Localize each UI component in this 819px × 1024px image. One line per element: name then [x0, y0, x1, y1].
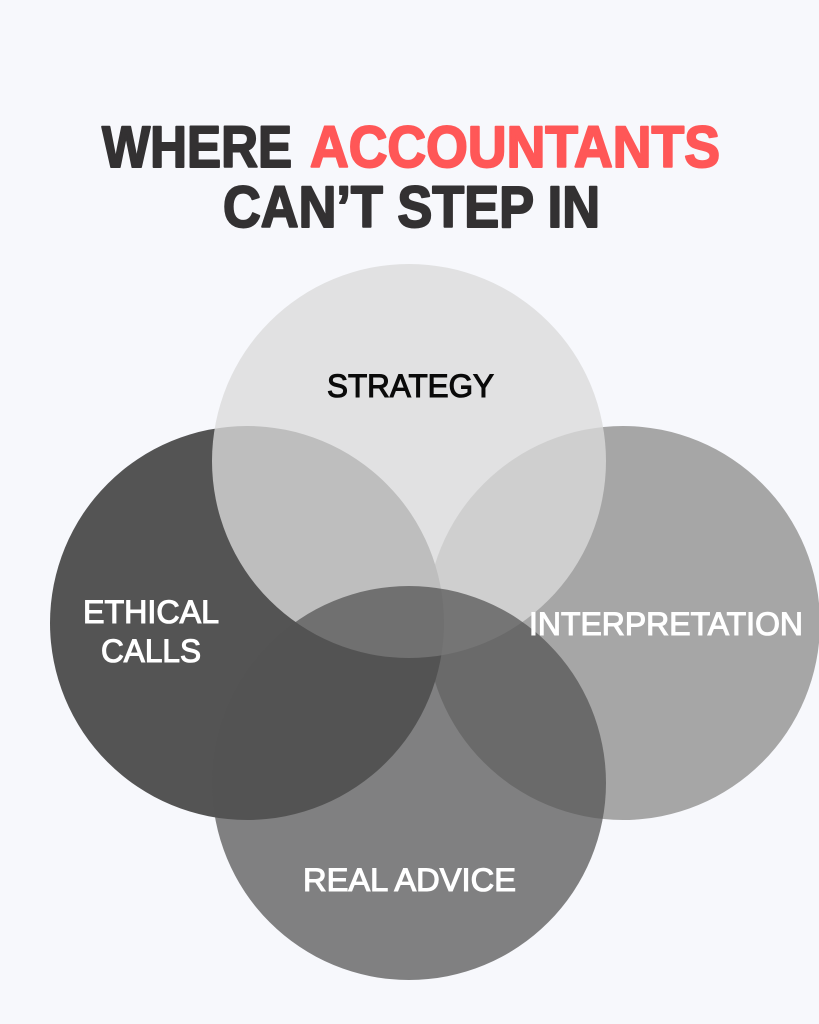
title [102, 115, 720, 240]
label: ethical calls: CALLS [101, 633, 201, 669]
circle: strategy [212, 264, 606, 658]
label: ethical calls: ETHICAL [83, 594, 219, 630]
title: WHERE [102, 115, 292, 180]
venn diagram [50, 264, 819, 980]
title: ACCOUNTANTS [310, 115, 720, 180]
label: interpretation: INTERPRETATION [529, 606, 803, 642]
title: CAN’T STEP IN [223, 175, 600, 240]
circle: interpretation [426, 426, 819, 820]
label: real advice: REAL ADVICE [303, 862, 516, 898]
label: ethical calls [83, 594, 219, 669]
circle: ethical calls [50, 426, 444, 820]
circle: real advice [212, 586, 606, 980]
label: strategy: STRATEGY [327, 368, 494, 404]
